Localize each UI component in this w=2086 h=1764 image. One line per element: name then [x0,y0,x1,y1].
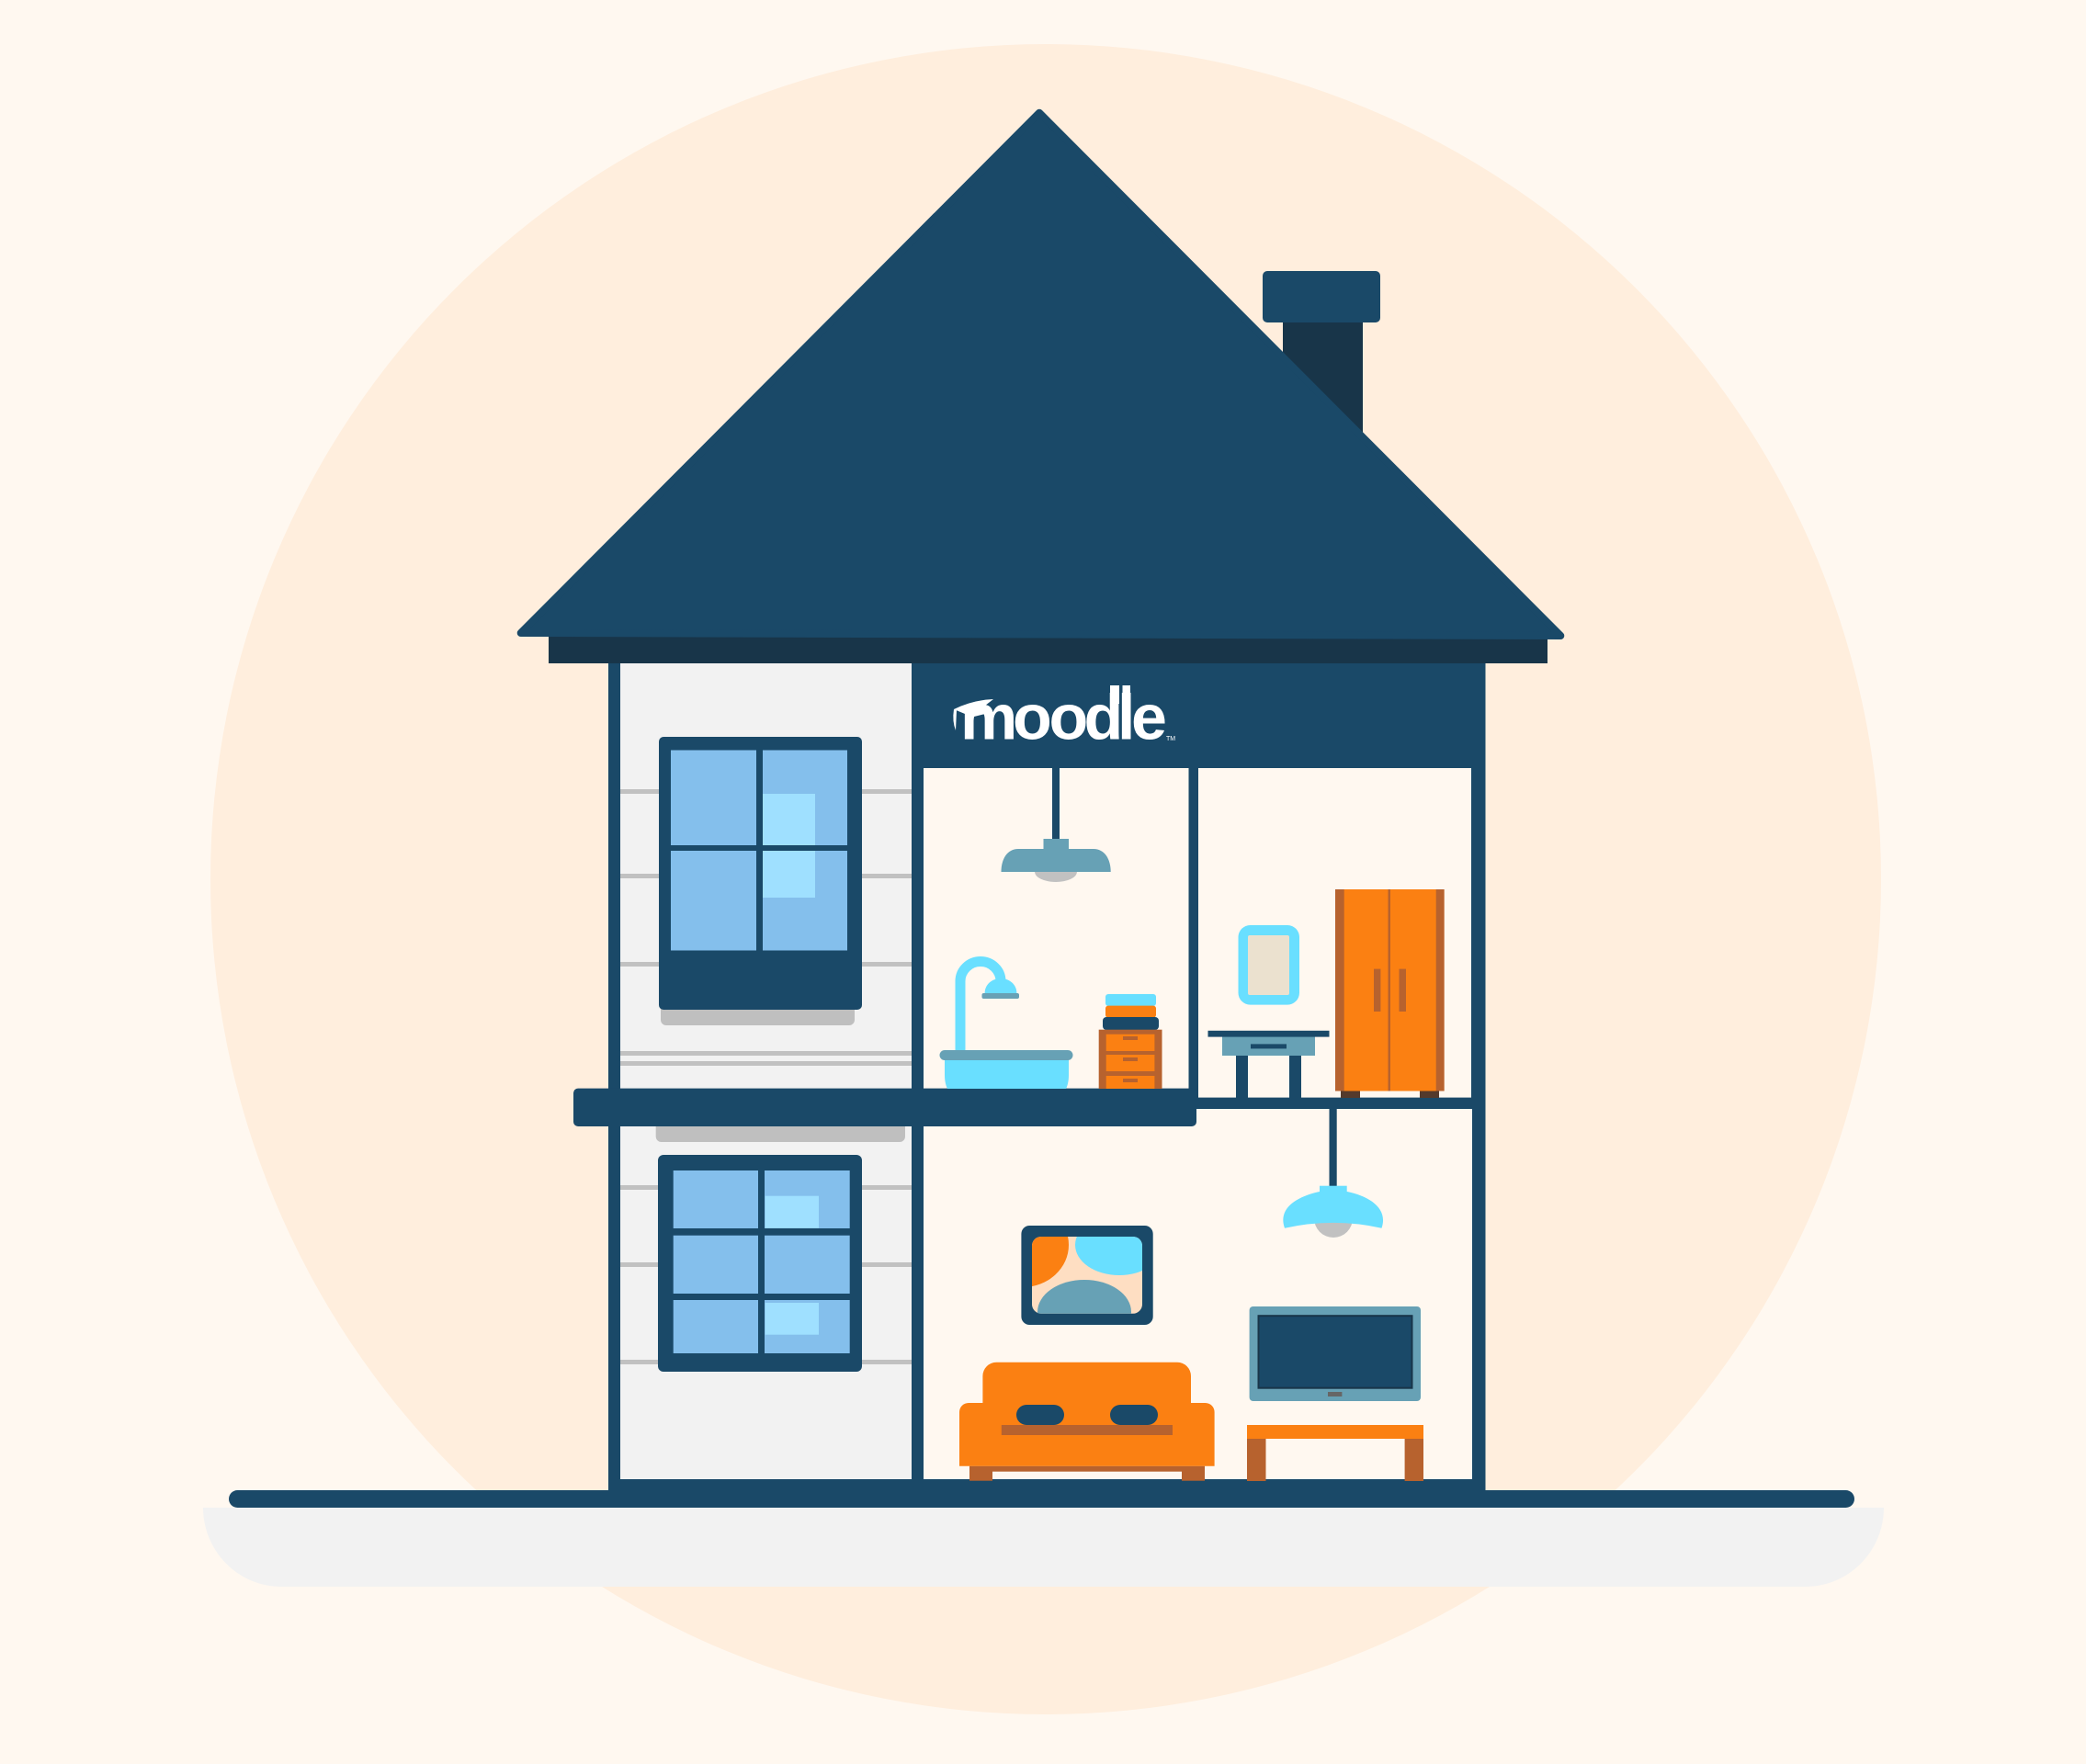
room: bathroom [924,768,1189,1089]
room: living room [924,1109,1472,1479]
bathtub with shower [939,961,1073,1089]
ground slab [203,1508,1884,1587]
dresser table [1207,1031,1329,1098]
upper window [659,737,862,1025]
eaves band [549,632,1547,663]
floor slab [573,1089,1196,1126]
chimney [1263,271,1380,441]
bathroom ceiling lamp [1002,768,1111,882]
sofa [959,1363,1215,1481]
lower window [656,1123,905,1372]
mirror [1239,925,1299,1005]
television [1250,1306,1421,1401]
moodle logo: TM [1166,736,1175,742]
moodle logo: moodle [960,682,1167,753]
wall picture [1021,1226,1153,1325]
background circle [210,44,1881,1714]
towels on drawers [1099,994,1162,1089]
tv table [1247,1425,1423,1481]
ground line [229,1490,1854,1508]
house body walls [608,663,1485,1508]
exterior wall panel [620,663,912,1479]
house [521,113,1560,1508]
living room ceiling lamp [1283,1109,1383,1238]
room: bedroom [1198,768,1471,1098]
roof [521,113,1560,636]
wardrobe [1335,889,1445,1098]
